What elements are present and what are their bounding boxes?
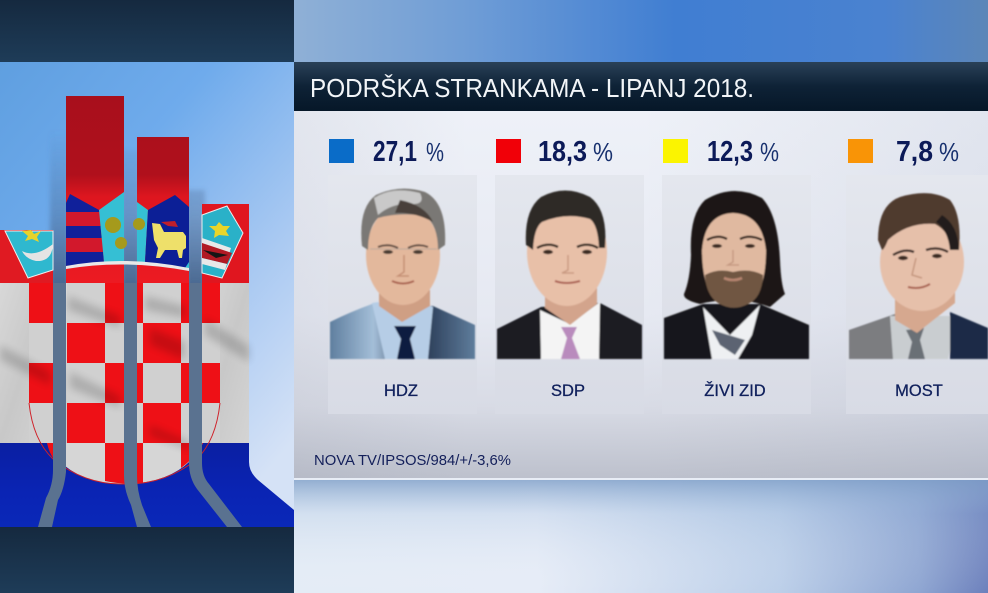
flag red bars bbox=[0, 96, 249, 283]
coat of arms chequerboard bbox=[29, 283, 220, 484]
value: Most: 7,8 bbox=[896, 136, 933, 168]
card: Most bbox=[846, 136, 988, 414]
legend swatch: Živi zid bbox=[663, 139, 688, 163]
value: SDP: 18,3 bbox=[538, 136, 587, 168]
grey bar gaps bbox=[38, 283, 242, 527]
portrait: Petrov bbox=[849, 193, 988, 359]
portrait: Plenković bbox=[330, 189, 475, 359]
bottom background band bbox=[294, 480, 988, 593]
value: HDZ: 27,1 bbox=[373, 136, 417, 168]
title bar bbox=[294, 62, 988, 111]
title: PODRŠKA STRANKAMA - LIPANJ 2018. bbox=[310, 73, 754, 103]
legend swatch: SDP bbox=[496, 139, 521, 163]
flag folds shading bbox=[0, 296, 249, 450]
party label: HDZ: HDZ bbox=[384, 382, 418, 400]
party label: SDP: SDP bbox=[551, 382, 585, 400]
value: Most bbox=[896, 136, 959, 168]
card: Živi zid bbox=[662, 136, 811, 414]
card: SDP bbox=[495, 136, 644, 414]
flag blue base bbox=[0, 443, 294, 527]
source note: NOVA TV/IPSOS/984/+/-3,6% bbox=[314, 453, 511, 469]
portrait: Sinčić bbox=[664, 191, 809, 359]
legend swatch: HDZ bbox=[329, 139, 354, 163]
crown shields bbox=[5, 192, 243, 278]
left top dark band bbox=[0, 0, 294, 62]
value: SDP: % bbox=[593, 137, 613, 167]
main panel bbox=[294, 111, 988, 480]
left column sky background bbox=[0, 62, 294, 528]
party label: Živi zid: ŽIVI ZID bbox=[704, 381, 766, 400]
value: HDZ: % bbox=[426, 137, 444, 167]
top background band bbox=[294, 0, 988, 62]
value: Živi zid: 12,3 bbox=[707, 136, 753, 168]
left bottom dark band bbox=[0, 527, 294, 593]
party label: Most: MOST bbox=[895, 382, 943, 400]
flag bar chart bbox=[0, 96, 294, 527]
legend swatch: Most bbox=[848, 139, 873, 163]
value: Živi zid: % bbox=[760, 137, 779, 167]
value: Most: % bbox=[939, 137, 959, 167]
portrait: Bernardić bbox=[497, 190, 642, 359]
card: HDZ bbox=[328, 136, 477, 414]
bar shadows bbox=[50, 130, 205, 300]
flag white band bbox=[0, 283, 249, 443]
